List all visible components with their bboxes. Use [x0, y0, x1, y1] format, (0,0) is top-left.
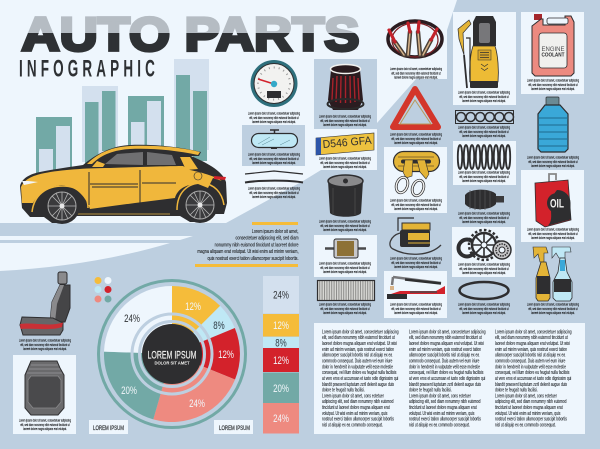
text column 1: blandit praesent luptatum zzril delenit augue duis — [322, 381, 395, 387]
part: jumper cables — [388, 21, 442, 80]
donut centre: LOREM IPSUM — [148, 350, 196, 362]
text column 2: blandit praesent luptatum zzril delenit augue duis — [409, 381, 482, 387]
caption — [527, 78, 579, 91]
text column 2: commodo consequat. Duis autem vel eum iriure — [409, 358, 480, 364]
icon: triangle — [393, 89, 438, 127]
caption: laoreet dolore magna aliquam erat volutpat. — [394, 75, 438, 80]
caption: elit, sed diam nonummy nibh euismod tincidunt ut — [528, 231, 578, 236]
panel: gears and bearings — [452, 227, 515, 277]
text column 2: Lorem ipsum dolor sit amet, cons ectetuer — [409, 393, 471, 399]
icon: wrench and brush — [387, 277, 445, 299]
text column 1: dolore te feugait nulla facilisi. — [322, 387, 365, 393]
part: car seat — [19, 272, 71, 351]
caption — [390, 132, 442, 145]
caption — [319, 219, 371, 232]
caption: laoreet dolore magna aliquam erat volutpat. — [462, 98, 506, 103]
donut percentages: 12% — [218, 349, 234, 361]
icon: sprays — [533, 247, 572, 301]
panel: coil spring — [453, 141, 516, 185]
caption — [458, 125, 510, 138]
front wheel — [44, 188, 80, 224]
text column 1: dolor in hendrerit in vulputate velit esse molestie — [322, 364, 393, 369]
caption: laoreet dolore magna aliquam erat volutpat. — [23, 426, 67, 431]
icon: mat — [25, 361, 64, 415]
background bar chart — [36, 59, 209, 173]
intro text block: quis nostrud exerci tation ullamcorper suscipit lobortis. — [207, 255, 298, 262]
text column 3: commodo consequat. Duis autem vel eum iriure — [495, 358, 566, 364]
part: speedometer — [248, 60, 300, 124]
caption: elit, sed diam nonummy nibh euismod tincidunt ut — [249, 115, 299, 120]
icon: panel filter — [318, 280, 374, 300]
text column 1: Lorem ipsum dolor sit amet, consectetuer adipiscing — [322, 329, 399, 334]
icon: bottle — [538, 97, 568, 152]
caption: Lorem ipsum dolor sit amet, consectetuer adipiscing — [390, 198, 442, 203]
caption — [248, 186, 300, 199]
caption: Lorem ipsum dolor sit amet, consectetuer adipiscing — [319, 114, 371, 119]
caption: elit, sed diam nonummy nibh euismod tincidunt ut — [391, 306, 441, 311]
caption: elit, sed diam nonummy nibh euismod tincidunt ut — [20, 342, 70, 347]
icon: mirror — [252, 130, 298, 149]
caption: laoreet dolore magna aliquam erat volutpat. — [23, 346, 67, 351]
icon: spring — [458, 145, 510, 169]
label box right — [214, 420, 253, 434]
segment: 20% teal — [104, 352, 172, 419]
caption — [527, 302, 579, 315]
panel: air filter — [314, 59, 377, 129]
donut percentages: 24% — [124, 313, 140, 325]
caption — [458, 90, 510, 103]
caption: elit, sed diam nonummy nibh euismod tincidunt ut — [20, 422, 70, 427]
caption: Lorem ipsum dolor sit amet, consectetuer adipiscing — [248, 152, 300, 157]
caption: Lorem ipsum dolor sit amet, consectetuer adipiscing — [527, 155, 579, 160]
text column 1: laoreet dolore magna aliquam erat volutpat. Ut wisi — [322, 340, 397, 346]
text column 1: enim ad minim veniam, quis nostrud exerci tation — [322, 346, 394, 352]
donut percentages — [121, 301, 234, 410]
icon: gasket — [456, 110, 514, 124]
stacked bar labels: 24% — [273, 289, 289, 302]
donut percentages: 8% — [213, 320, 225, 332]
text column 3: at vero eros et accumsan et iusto odio dignissim qui — [495, 375, 571, 381]
text column 1: volutpat. Ut wisi enim ad minim veniam, quis — [322, 410, 388, 416]
text column 3: tincidunt ut laoreet dolore magna aliquam erat — [495, 404, 563, 410]
text column 2: nisl ut aliquip ex ea commodo consequat. — [409, 422, 470, 428]
part: washer fluid bottle — [527, 97, 579, 168]
caption: Lorem ipsum dolor sit amet, consectetuer adipiscing — [390, 302, 442, 307]
icon: wipers — [245, 171, 303, 182]
panel: rear view mirror — [242, 125, 305, 166]
stacked bar labels: 8% — [275, 337, 287, 350]
panel: engine coolant — [521, 12, 584, 94]
caption: Lorem ipsum dolor sit amet, consectetuer adipiscing — [527, 227, 579, 232]
panel: tyre tools — [384, 271, 447, 318]
subheading: infographic: INFOGRAPHIC — [19, 55, 155, 83]
stacked bar labels: 20% — [273, 383, 289, 395]
caption: elit, sed diam nonummy nibh euismod tincidunt ut — [391, 202, 441, 207]
caption: laoreet dolore magna aliquam erat volutpat. — [394, 264, 438, 269]
caption: Lorem ipsum dolor sit amet, consectetuer adipiscing — [458, 211, 510, 216]
text column 3: dolor in hendrerit in vulputate velit esse molestie — [495, 364, 566, 369]
panel: tow strap — [384, 147, 447, 213]
panel: fuel filter — [314, 235, 377, 277]
caption: elit, sed diam nonummy nibh euismod tincidunt ut — [391, 136, 441, 141]
icon: coolant jug: ENGINE — [542, 47, 564, 53]
legend dots — [94, 277, 112, 302]
caption: laoreet dolore magna aliquam erat volutpat. — [394, 206, 438, 211]
text column 1: ullamcorper suscipit lobortis nisl ut aliquip ex ea — [322, 352, 393, 358]
text column 1: nostrud exerci tation ullamcorper suscipit lobortis — [322, 416, 394, 422]
icon: boot — [465, 190, 504, 210]
donut percentages: 12% — [185, 301, 201, 313]
text column 2: dolore te feugait nulla facilisi. — [409, 387, 452, 393]
heading: auto parts — [20, 16, 360, 53]
intro text block: magna aliquam erat volutpat. Ut wisi enim ad minim veniam, — [197, 248, 298, 255]
caption: elit, sed diam nonummy nibh euismod tincidunt ut — [320, 118, 370, 123]
caption: Lorem ipsum dolor sit amet, consectetuer adipiscing — [527, 302, 579, 307]
caption — [458, 211, 510, 224]
caption: laoreet dolore magna aliquam erat volutpat. — [462, 178, 506, 183]
intro text block — [195, 222, 299, 267]
text column 2: ullamcorper suscipit lobortis nisl ut aliquip ex ea — [409, 352, 480, 358]
intro text block: consectetuer adipiscing elit, sed diam — [236, 235, 299, 242]
icon: belt — [460, 282, 508, 299]
caption: elit, sed diam nonummy nibh euismod tincidunt ut — [459, 174, 509, 179]
text column 3: elit, sed diam nonummy nibh euismod tincidunt ut — [495, 334, 568, 340]
segment: 8% light blue — [172, 306, 235, 354]
caption: Lorem ipsum dolor sit amet, consectetuer adipiscing — [458, 262, 510, 267]
caption — [390, 302, 442, 315]
heading: auto parts: AUTO PARTS — [22, 8, 360, 60]
stacked bar labels: 12% — [273, 320, 289, 332]
text column 1: adipiscing elit, sed diam nonummy nibh euismod — [322, 398, 394, 404]
caption — [390, 66, 442, 80]
stacked bar labels: 12% — [273, 355, 289, 367]
caption: elit, sed diam nonummy nibh euismod tincidunt ut — [459, 215, 509, 220]
text column 3: dolore te feugait nulla facilisi. — [495, 387, 538, 393]
rear wheel — [182, 187, 218, 223]
icon: coolant jug — [532, 14, 574, 76]
caption: elit, sed diam nonummy nibh euismod tincidunt ut — [320, 223, 370, 228]
text column 2: laoreet dolore magna aliquam erat volutpat. Ut wisi — [409, 340, 484, 346]
caption — [319, 156, 371, 169]
caption: laoreet dolore magna aliquam erat volutpat. — [462, 133, 506, 138]
caption: elit, sed diam nonummy nibh euismod tincidunt ut — [320, 306, 370, 311]
text column 2: volutpat. Ut wisi enim ad minim veniam, quis — [409, 410, 475, 416]
donut percentages: 24% — [189, 398, 205, 410]
caption: Lorem ipsum dolor sit amet, consectetuer adipiscing — [248, 186, 300, 191]
icon: plate: D546 GFA — [322, 135, 373, 151]
caption — [19, 338, 71, 351]
caption: Lorem ipsum dolor sit amet, consectetuer adipiscing — [390, 66, 442, 71]
caption: elit, sed diam nonummy nibh euismod tincidunt ut — [249, 190, 299, 195]
caption: laoreet dolore magna aliquam erat volutpat. — [462, 310, 506, 315]
caption: Lorem ipsum dolor sit amet, consectetuer adipiscing — [458, 170, 510, 175]
caption: Lorem ipsum dolor sit amet, consectetuer adipiscing — [527, 78, 579, 83]
label box left: LOREM IPSUM — [93, 425, 124, 432]
intro text block: nonummy nibh euismod tincidunt ut laoreet dolore — [215, 242, 299, 249]
caption: Lorem ipsum dolor sit amet, consectetuer adipiscing — [319, 261, 371, 266]
text column 3: nisl ut aliquip ex ea commodo consequat. — [495, 422, 556, 428]
text column 3: adipiscing elit, sed diam nonummy nibh euismod — [495, 398, 567, 404]
stacked bar labels: 24% — [273, 413, 289, 425]
caption: Lorem ipsum dolor sit amet, consectetuer adipiscing — [390, 132, 442, 137]
text panel: lorem ipsum columns — [314, 323, 585, 434]
caption — [390, 256, 442, 269]
caption: laoreet dolore magna aliquam erat volutpat. — [531, 310, 575, 315]
donut centre — [142, 324, 202, 384]
text column 3: volutpat. Ut wisi enim ad minim veniam, quis — [495, 410, 561, 416]
part: spray bottles — [527, 247, 579, 315]
panel: motor oil — [521, 170, 584, 242]
caption: laoreet dolore magna aliquam erat volutpat. — [323, 227, 367, 232]
icon: cables — [388, 21, 442, 57]
caption: laoreet dolore magna aliquam erat volutpat. — [252, 160, 296, 165]
caption: Lorem ipsum dolor sit amet, consectetuer adipiscing — [319, 302, 371, 307]
caption: laoreet dolore magna aliquam erat volutpat. — [531, 86, 575, 91]
intro text block: Lorem ipsum dolor sit amet, — [252, 228, 298, 235]
caption — [248, 111, 300, 124]
caption: elit, sed diam nonummy nibh euismod tincidunt ut — [528, 159, 578, 164]
caption: laoreet dolore magna aliquam erat volutpat. — [394, 140, 438, 145]
caption — [319, 302, 371, 315]
icon: air filter — [328, 64, 364, 110]
caption — [319, 114, 371, 127]
caption: Lorem ipsum dolor sit amet, consectetuer adipiscing — [248, 111, 300, 116]
part: air compressor — [390, 218, 442, 269]
caption: laoreet dolore magna aliquam erat volutpat. — [394, 310, 438, 315]
part: licence plate — [316, 133, 374, 169]
icon: pressure washer — [458, 16, 498, 88]
caption: laoreet dolore magna aliquam erat volutpat. — [323, 269, 367, 274]
caption: Lorem ipsum dolor sit amet, consectetuer adipiscing — [19, 418, 71, 423]
segment: 24% white — [104, 286, 172, 354]
icon: compressor — [390, 218, 441, 254]
text column 3: enim ad minim veniam, quis nostrud exerci tation — [495, 346, 567, 352]
icon: coolant jug: COOLANT — [542, 52, 565, 58]
text column 3 — [495, 329, 572, 428]
text column 2: tincidunt ut laoreet dolore magna aliquam erat — [409, 404, 477, 410]
text column 1: consequat, vel illum dolore eu feugiat nulla facilisis — [322, 369, 397, 375]
text column 2 — [409, 329, 486, 428]
caption — [19, 418, 71, 431]
part: wiper blades — [245, 171, 303, 199]
caption: elit, sed diam nonummy nibh euismod tincidunt ut — [391, 71, 441, 76]
part: drive belt — [458, 282, 510, 315]
caption: elit, sed diam nonummy nibh euismod tincidunt ut — [320, 265, 370, 270]
text column 1: commodo consequat. Duis autem vel eum iriure — [322, 358, 393, 364]
caption: elit, sed diam nonummy nibh euismod tincidunt ut — [528, 82, 578, 87]
caption: laoreet dolore magna aliquam erat volutpat. — [462, 270, 506, 275]
heading: auto parts: AUTO PARTS — [22, 8, 360, 60]
text column 3: blandit praesent luptatum zzril delenit augue duis — [495, 381, 568, 387]
part: rubber boot — [458, 190, 510, 224]
text column 2: elit, sed diam nonummy nibh euismod tincidunt ut — [409, 334, 482, 340]
caption: Lorem ipsum dolor sit amet, consectetuer adipiscing — [458, 125, 510, 130]
caption — [390, 198, 442, 211]
stacked bar labels — [273, 289, 289, 425]
icon: tow strap — [394, 152, 440, 197]
text column 2: dolor in hendrerit in vulputate velit esse molestie — [409, 364, 480, 369]
donut chart — [98, 280, 246, 428]
text column 1 — [322, 329, 399, 428]
part: oil filter — [319, 175, 371, 232]
caption: elit, sed diam nonummy nibh euismod tincidunt ut — [320, 160, 370, 165]
caption: elit, sed diam nonummy nibh euismod tincidunt ut — [391, 260, 441, 265]
title — [20, 16, 360, 76]
donut percentages: 20% — [121, 385, 137, 397]
icon: fuel filter — [325, 239, 366, 258]
caption: laoreet dolore magna aliquam erat volutpat. — [323, 122, 367, 127]
caption: elit, sed diam nonummy nibh euismod tincidunt ut — [249, 156, 299, 161]
caption — [319, 261, 371, 274]
text column 2: adipiscing elit, sed diam nonummy nibh euismod — [409, 398, 481, 404]
text column 1: nisl ut aliquip ex ea commodo consequat. — [322, 422, 383, 428]
caption: laoreet dolore magna aliquam erat volutpat. — [531, 235, 575, 240]
icon: gears — [458, 230, 511, 260]
part: head gasket — [456, 110, 514, 138]
caption: laoreet dolore magna aliquam erat volutpat. — [531, 163, 575, 168]
caption: elit, sed diam nonummy nibh euismod tincidunt ut — [528, 306, 578, 311]
caption — [527, 227, 579, 240]
segment: 24% pink — [153, 354, 235, 422]
caption: Lorem ipsum dolor sit amet, consectetuer adipiscing — [319, 219, 371, 224]
caption: laoreet dolore magna aliquam erat volutpat. — [252, 119, 296, 124]
segment: 12% red — [172, 328, 240, 380]
caption: laoreet dolore magna aliquam erat volutpat. — [252, 194, 296, 199]
part: cabin air filter — [318, 280, 374, 315]
caption: Lorem ipsum dolor sit amet, consectetuer adipiscing — [458, 90, 510, 95]
caption — [527, 155, 579, 168]
text column 2: at vero eros et accumsan et iusto odio dignissim qui — [409, 375, 485, 381]
caption: laoreet dolore magna aliquam erat volutpat. — [323, 164, 367, 169]
panel: floor mat — [13, 355, 76, 434]
caption: laoreet dolore magna aliquam erat volutpat. — [323, 310, 367, 315]
caption — [458, 170, 510, 183]
label box left — [89, 420, 128, 434]
caption — [458, 302, 510, 315]
text column 2: enim ad minim veniam, quis nostrud exerci tation — [409, 346, 481, 352]
segment: 12% yellow — [172, 286, 220, 354]
text column 3: laoreet dolore magna aliquam erat volutpat. Ut wisi — [495, 340, 570, 346]
label box right: LOREM IPSUM — [219, 425, 250, 432]
caption: elit, sed diam nonummy nibh euismod tincidunt ut — [459, 306, 509, 311]
caption: Lorem ipsum dolor sit amet, consectetuer adipiscing — [319, 156, 371, 161]
caption: Lorem ipsum dolor sit amet, consectetuer adipiscing — [19, 338, 71, 343]
text column 2: consequat, vel illum dolore eu feugiat nulla facilisis — [409, 369, 484, 375]
text column 1: tincidunt ut laoreet dolore magna aliquam erat — [322, 404, 390, 410]
caption: elit, sed diam nonummy nibh euismod tincidunt ut — [459, 129, 509, 134]
caption: elit, sed diam nonummy nibh euismod tincidunt ut — [459, 266, 509, 271]
panel: pressure washer — [453, 12, 516, 105]
caption: elit, sed diam nonummy nibh euismod tincidunt ut — [459, 94, 509, 99]
part: warning triangle — [390, 89, 442, 145]
text column 2: nostrud exerci tation ullamcorper suscipit lobortis — [409, 416, 481, 422]
text column 3: Lorem ipsum dolor sit amet, cons ectetuer — [495, 393, 557, 399]
caption: Lorem ipsum dolor sit amet, consectetuer adipiscing — [458, 302, 510, 307]
text column 1: elit, sed diam nonummy nibh euismod tincidunt ut — [322, 334, 395, 340]
caption — [458, 262, 510, 275]
caption — [248, 152, 300, 165]
caption: laoreet dolore magna aliquam erat volutpat. — [462, 219, 506, 224]
icon: speedometer — [250, 60, 298, 107]
donut centre: DOLOR SIT AMET — [154, 360, 190, 366]
text column 1: at vero eros et accumsan et iusto odio dignissim qui — [322, 375, 398, 381]
stacked bar chart — [263, 276, 299, 434]
text column 1: Lorem ipsum dolor sit amet, cons ectetuer — [322, 393, 384, 399]
text column 3: ullamcorper suscipit lobortis nisl ut aliquip ex ea — [495, 352, 566, 358]
icon: seat — [20, 272, 70, 335]
car — [20, 145, 227, 224]
caption: Lorem ipsum dolor sit amet, consectetuer adipiscing — [390, 256, 442, 261]
text column 3: Lorem ipsum dolor sit amet, consectetuer adipiscing — [495, 329, 572, 334]
text column 3: nostrud exerci tation ullamcorper suscipit lobortis — [495, 416, 567, 422]
icon: oil can: OIL — [550, 196, 564, 210]
text column 3: consequat, vel illum dolore eu feugiat nulla facilisis — [495, 369, 570, 375]
icon: oil filter — [328, 175, 363, 217]
text column 2: Lorem ipsum dolor sit amet, consectetuer adipiscing — [409, 329, 486, 334]
